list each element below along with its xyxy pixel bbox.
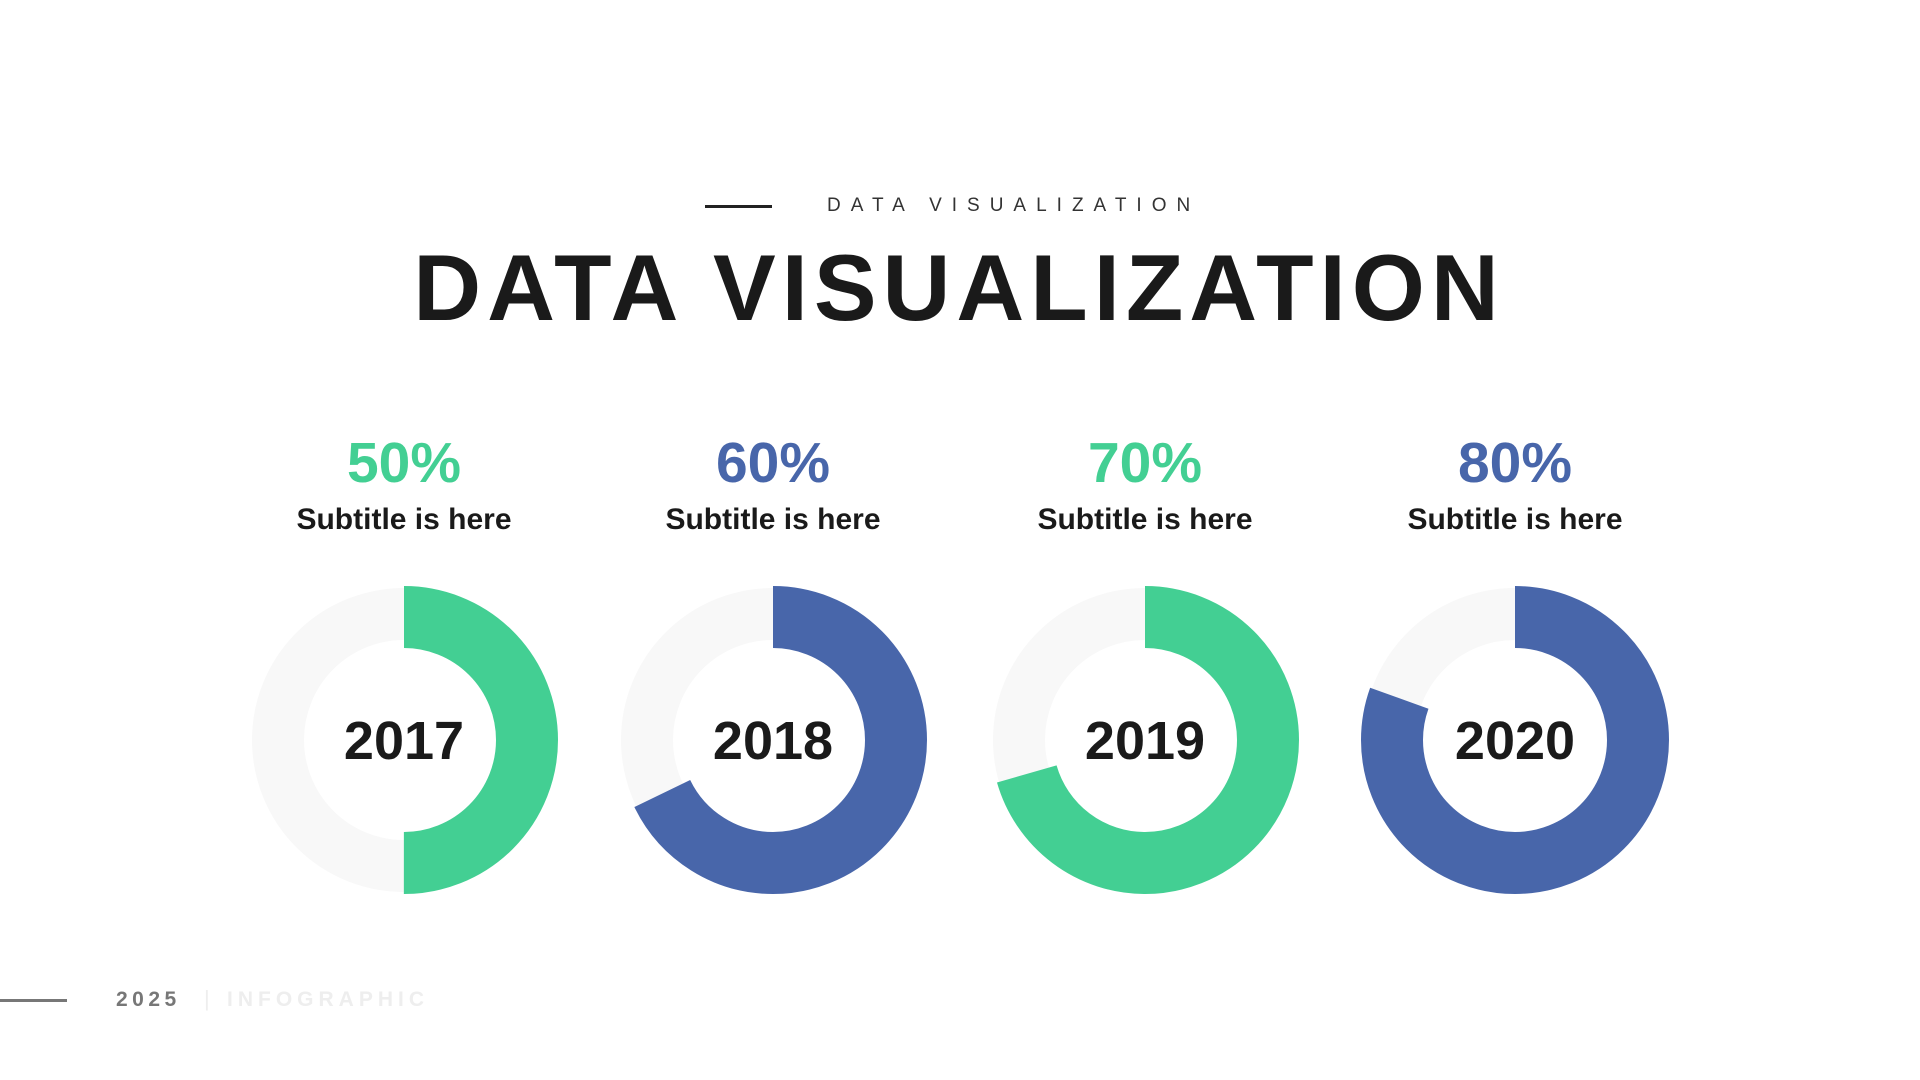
label 2018 [665, 431, 881, 536]
label 2017: Subtitle is here [296, 503, 512, 536]
label 2018: Subtitle is here [665, 503, 881, 536]
donut 2020 [1389, 614, 1641, 866]
label 2020 [1407, 431, 1623, 536]
footer: | [204, 986, 210, 1011]
donut 2018 [647, 614, 899, 866]
footer: 2025 [116, 988, 181, 1011]
header line [705, 205, 772, 208]
footer [0, 986, 429, 1011]
donut 2017 [278, 614, 530, 866]
donut 2019: 2019 [1085, 711, 1205, 771]
title: DATA VISUALIZATION [413, 235, 1505, 340]
label 2020: Subtitle is here [1407, 503, 1623, 536]
label 2019: 70% [1088, 431, 1202, 495]
footer: INFOGRAPHIC [227, 988, 429, 1011]
label 2017 [296, 431, 512, 536]
donut 2019 [1019, 614, 1271, 866]
label 2020: 80% [1458, 431, 1572, 495]
label 2018: 60% [716, 431, 830, 495]
donut 2020: 2020 [1455, 711, 1575, 771]
label 2019 [1037, 431, 1253, 536]
label 2019: Subtitle is here [1037, 503, 1253, 536]
donut 2017: 2017 [344, 711, 464, 771]
eyebrow text: DATA VISUALIZATION [827, 195, 1200, 216]
label 2017: 50% [347, 431, 461, 495]
donut 2018: 2018 [713, 711, 833, 771]
